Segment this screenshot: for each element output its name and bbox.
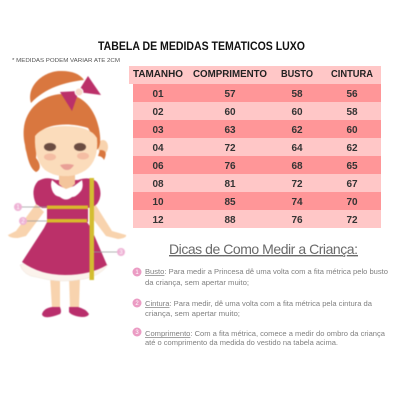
table rows: 04 xyxy=(152,143,164,154)
table header: BUSTO xyxy=(281,68,313,80)
table rows: 70 xyxy=(346,197,358,208)
marker 3 xyxy=(94,248,125,256)
table rows: 03 xyxy=(152,125,164,136)
illustration: girl with measuring tape xyxy=(8,71,126,317)
table rows: 56 xyxy=(346,89,358,100)
right curl xyxy=(98,150,106,160)
measuring tape: bust xyxy=(47,206,88,209)
table rows: 88 xyxy=(224,215,236,226)
table rows: 81 xyxy=(224,179,236,190)
table rows xyxy=(152,89,358,226)
size table xyxy=(129,66,381,228)
marker 1 xyxy=(14,203,47,211)
tip 3: length: 3 xyxy=(135,330,139,336)
table rows: 72 xyxy=(224,143,236,154)
hair bun xyxy=(30,71,84,103)
table rows: 72 xyxy=(346,215,358,226)
tip 3: length: até o comprimento da medida do vestido na tabela acima. xyxy=(145,338,338,347)
shoes xyxy=(42,307,89,317)
ears xyxy=(25,140,35,154)
cheeks xyxy=(44,154,56,160)
table rows: 64 xyxy=(291,143,303,154)
collar xyxy=(51,180,83,200)
tip 3: length xyxy=(132,328,385,347)
table rows: 60 xyxy=(224,107,236,118)
sleeves and bodice xyxy=(33,178,100,208)
measuring tape: length xyxy=(90,178,94,280)
tip 1: bust: 1 xyxy=(135,270,139,276)
tip 2: waist xyxy=(132,298,372,318)
marker 2: 2 xyxy=(21,219,25,225)
title: TABELA DE MEDIDAS TEMATICOS LUXO xyxy=(98,41,305,53)
table rows: 65 xyxy=(346,161,358,172)
tip 1: bust: da criança, sem apertar muito; xyxy=(145,278,249,287)
tip 2: waist: 2 xyxy=(135,301,139,307)
table rows: 76 xyxy=(291,215,303,226)
neck xyxy=(59,170,75,191)
table rows: 57 xyxy=(224,89,236,100)
table rows: 60 xyxy=(346,125,358,136)
eyes xyxy=(44,143,56,151)
table rows: 02 xyxy=(152,107,164,118)
bow xyxy=(60,76,101,111)
marker 1: 1 xyxy=(16,205,20,211)
legs xyxy=(50,276,80,308)
table rows: 60 xyxy=(291,107,303,118)
table rows: 62 xyxy=(291,125,303,136)
hair xyxy=(24,94,100,172)
table rows: 62 xyxy=(346,143,358,154)
dress xyxy=(22,222,107,275)
table rows: 68 xyxy=(291,161,303,172)
table rows: 06 xyxy=(152,161,164,172)
table rows: 01 xyxy=(152,89,164,100)
table header: CINTURA xyxy=(331,68,373,80)
table rows: 58 xyxy=(291,89,303,100)
measuring tape: waist xyxy=(47,219,87,222)
marker 2 xyxy=(19,217,47,225)
skirt lace xyxy=(20,262,108,281)
table rows: 72 xyxy=(291,179,303,190)
tip 1: bust: Busto: Para medir a Princesa dê uma volta com a fita métrica pelo busto xyxy=(145,267,388,276)
mouth xyxy=(60,164,74,170)
arms xyxy=(8,204,126,239)
table rows: 10 xyxy=(152,197,164,208)
tip 2: waist: criança, sem apertar muito; xyxy=(145,309,240,318)
table rows: 85 xyxy=(224,197,236,208)
tip 2: waist: Cintura: Para medir, dê uma volta com a fita métrica pela cintura da xyxy=(145,299,372,308)
marker 3: 3 xyxy=(119,250,123,256)
face xyxy=(35,126,97,176)
tip 3: length: Comprimento : Com a fita métrica, comece a medir do ombro da criança xyxy=(145,329,385,338)
table rows: 67 xyxy=(346,179,358,190)
table rows: 76 xyxy=(224,161,236,172)
table rows: 12 xyxy=(152,215,164,226)
note: measures may vary: * MEDIDAS PODEM VARIAR ATE 2CM xyxy=(12,58,120,64)
table rows: 58 xyxy=(346,107,358,118)
table backgrounds xyxy=(129,66,381,228)
table rows: 74 xyxy=(291,197,303,208)
tip 1: bust xyxy=(132,267,388,287)
table rows: 63 xyxy=(224,125,236,136)
table header: TAMANHO xyxy=(133,68,183,80)
tips heading: Dicas de Como Medir a Criança: xyxy=(169,241,358,257)
table rows: 08 xyxy=(152,179,164,190)
table header xyxy=(133,68,373,80)
table header: COMPRIMENTO xyxy=(193,68,267,80)
